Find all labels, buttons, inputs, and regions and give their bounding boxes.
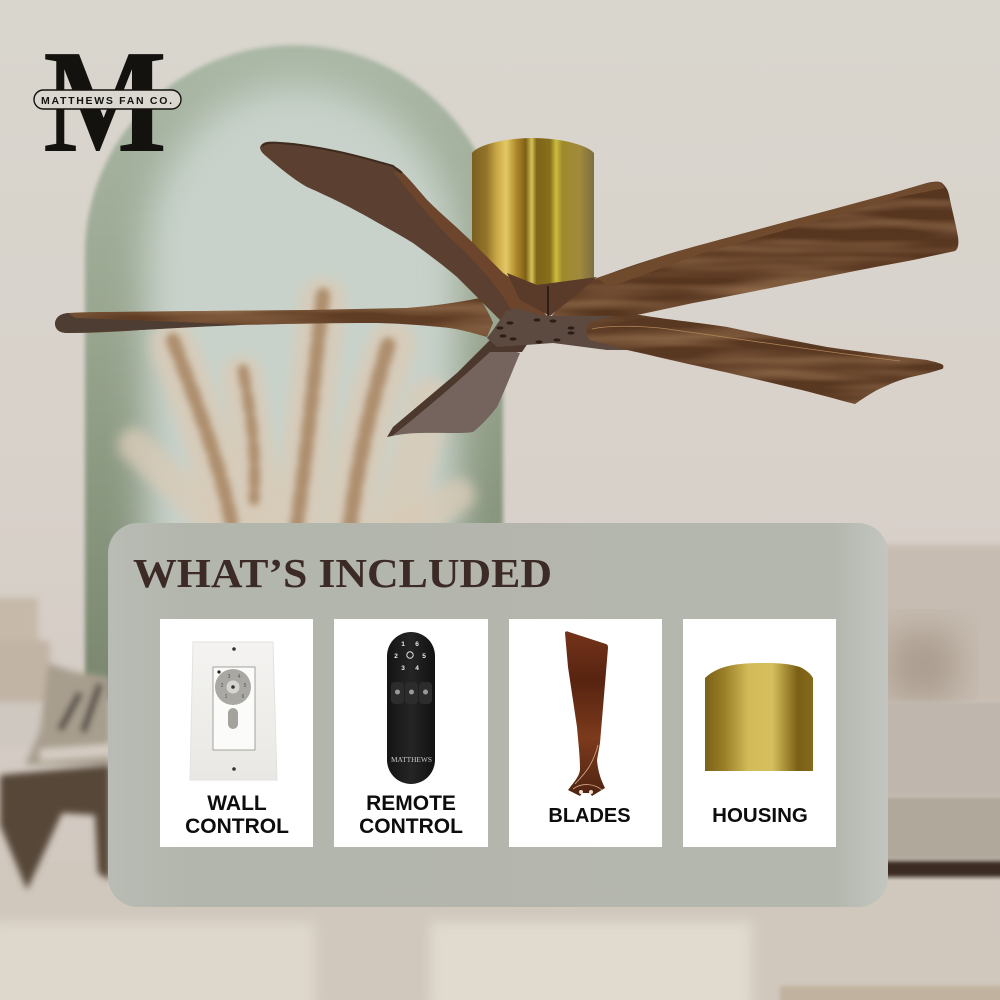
ceiling fan [55, 138, 958, 437]
icon: remote: 4 [415, 665, 419, 672]
sofa right [870, 545, 1000, 877]
card: blades [509, 619, 662, 847]
label: blades: BLADES [548, 805, 631, 827]
heading: WHAT’S INCLUDED [133, 550, 552, 596]
icon: wall control plate: 4 [238, 674, 241, 680]
logo name pill: MATTHEWS FAN CO. [41, 95, 172, 107]
icon: wall control plate: 6 [242, 694, 245, 700]
fan blade: upper right [550, 182, 958, 318]
logo name pill [34, 90, 181, 109]
card: remote control [334, 619, 488, 847]
icon: wall control plate: 3 [228, 674, 231, 680]
logo: Matthews Fan Co. [34, 20, 181, 184]
fan blade: lower right [586, 315, 943, 404]
fan hub joint [507, 273, 597, 316]
icon: remote: 3 [401, 665, 405, 672]
fan housing [472, 138, 594, 286]
icon: remote [387, 632, 435, 784]
icon: wall control plate [190, 642, 277, 780]
pale light inside niche [145, 85, 458, 660]
icon: remote: MATTHEWS [391, 756, 432, 764]
label: remote control: REMOTE [366, 792, 456, 815]
label: housing: HOUSING [712, 804, 808, 827]
pampas grass [135, 295, 458, 525]
icon: wooden blade [565, 631, 608, 796]
icon: remote: 5 [422, 653, 426, 660]
fan blade: left [55, 298, 493, 337]
icon: remote: 2 [394, 653, 398, 660]
card: housing [683, 619, 836, 847]
floor [0, 862, 1000, 1000]
armchair left with throw blanket [0, 598, 110, 890]
icon: wall control plate: 1 [225, 694, 228, 700]
icon: remote: 1 [401, 641, 405, 648]
icon: gold housing [705, 663, 813, 771]
label: wall control: WALL [207, 792, 267, 815]
logo monogram M: M [43, 20, 167, 184]
fan blade: upper left [260, 142, 547, 322]
icon: remote: 6 [415, 641, 419, 648]
green arched niche [85, 45, 503, 700]
panel: what's included [108, 523, 888, 907]
card: wall control [160, 619, 313, 847]
fan blade: lower left [387, 340, 528, 437]
label: remote control: CONTROL [359, 815, 463, 838]
icon: wall control plate: 2 [221, 683, 224, 689]
icon: wall control plate: 5 [244, 683, 247, 689]
fan hub with screws [487, 308, 640, 350]
label: wall control: CONTROL [185, 815, 289, 838]
